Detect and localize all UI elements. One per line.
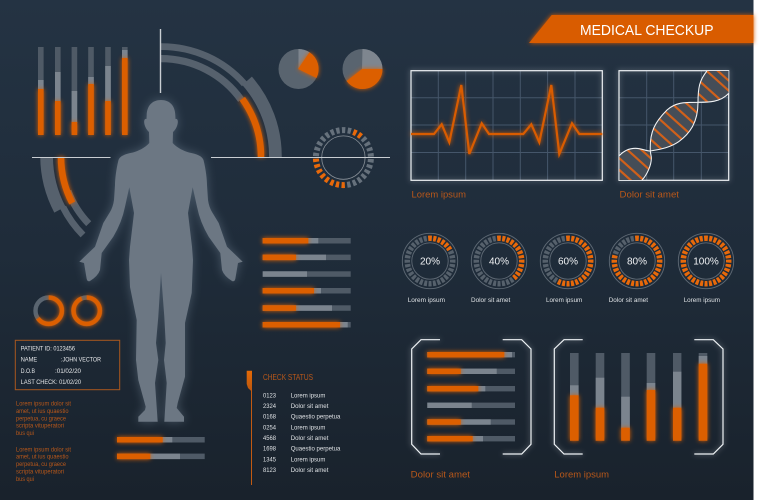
gauge 60%: 60% <box>558 257 578 268</box>
panel: bracketed vertical bars <box>554 340 723 454</box>
chart: horizontal bars right of body <box>263 238 351 328</box>
gauge 20%: 20% <box>420 257 440 268</box>
bracketed bars label: Dolor sit amet <box>411 470 470 480</box>
gauge 40%: 40% <box>489 257 509 268</box>
check status table: 0254 <box>263 424 276 431</box>
gauge 100% <box>678 233 734 289</box>
tick ring gauge <box>314 129 372 187</box>
gauge labels <box>408 297 720 304</box>
check status table: CHECK STATUS <box>263 373 313 382</box>
panel: ECG chart <box>411 71 602 180</box>
gauge labels: Lorem ipsum <box>684 297 720 304</box>
check status table: Lorem ipsum <box>291 456 325 463</box>
pie chart one <box>278 49 319 89</box>
gauge 20% <box>402 233 458 289</box>
gauge 100%: 100% <box>693 257 719 268</box>
radial arcs around the body <box>47 47 275 235</box>
check status table: Lorem ipsum <box>291 424 325 431</box>
donut ring two <box>74 298 100 324</box>
patient info box <box>15 340 120 390</box>
check status table: Dolor sit amet <box>291 467 329 474</box>
gauge labels: Dolor sit amet <box>609 297 648 304</box>
check status table: Lorem ipsum <box>291 392 325 399</box>
DNA label: Dolor sit amet <box>620 190 679 200</box>
check status table: Quaestio perpetua <box>291 446 341 453</box>
orange paragraph one: amet, ut ius quaestio <box>16 408 69 415</box>
human body silhouette <box>79 100 243 422</box>
orange paragraph two: amet, ut ius quaestio <box>16 454 69 461</box>
header banner <box>529 15 754 43</box>
panel: bracketed horizontal bars <box>412 340 531 454</box>
gauge labels: Lorem ipsum <box>546 297 583 304</box>
gauge labels: Lorem ipsum <box>408 297 445 304</box>
ECG line <box>411 85 602 154</box>
orange paragraph one: perpetua, cu graece <box>16 415 66 422</box>
orange paragraph two: scripta vituperatori <box>16 469 64 476</box>
check status table: Dolor sit amet <box>291 403 329 410</box>
check status table: 8123 <box>263 467 276 474</box>
orange paragraph two: perpetua, cu graece <box>16 461 66 468</box>
bracketed vertical bars label: Lorem ipsum <box>554 470 609 480</box>
check status table <box>263 373 341 474</box>
check status table: 4568 <box>263 435 276 442</box>
chart: bars below the feet <box>117 437 205 459</box>
pie chart two <box>342 49 382 89</box>
patient info box: NAME <box>21 357 38 364</box>
ECG label: Lorem ipsum <box>412 190 466 200</box>
orange paragraph one: Lorem ipsum dolor sit <box>16 401 71 408</box>
orange paragraph one <box>16 401 71 437</box>
orange paragraph two: Lorem ipsum dolor sit <box>16 446 71 453</box>
patient info box: LAST CHECK: 01/02/20 <box>21 379 81 386</box>
check status table: 1698 <box>263 446 276 453</box>
check status table: 2324 <box>263 403 276 410</box>
gauge 60% <box>540 233 596 289</box>
patient info box: :01/02/20 <box>55 368 81 375</box>
check status marker line <box>247 371 252 485</box>
patient info box: D.O.B <box>21 368 35 375</box>
header banner: MEDICAL CHECKUP <box>580 23 714 39</box>
check status table: 0168 <box>263 414 276 421</box>
patient info box: PATIENT ID: 0123456 <box>21 346 75 353</box>
check status table: 1345 <box>263 456 276 463</box>
check status table: Quaestio perpetua <box>291 414 341 421</box>
panel: DNA chart <box>616 67 732 184</box>
gauge 80% <box>609 233 665 289</box>
check status table: 0123 <box>263 392 276 399</box>
orange paragraph one: scripta vituperatori <box>16 423 64 430</box>
gauge labels: Dolor sit amet <box>471 297 510 304</box>
orange paragraph two <box>16 446 71 483</box>
check status table: Dolor sit amet <box>291 435 329 442</box>
orange paragraph two: bus qui <box>16 476 34 483</box>
axis lines <box>32 29 390 158</box>
chart: top-left vertical bars <box>38 47 128 135</box>
DNA helix <box>619 71 729 180</box>
gauge 80%: 80% <box>627 257 647 268</box>
gauge 40% <box>471 233 527 289</box>
patient info box: :JOHN VECTOR <box>61 357 101 364</box>
donut ring one <box>36 298 62 324</box>
orange paragraph one: bus qui <box>16 430 34 437</box>
